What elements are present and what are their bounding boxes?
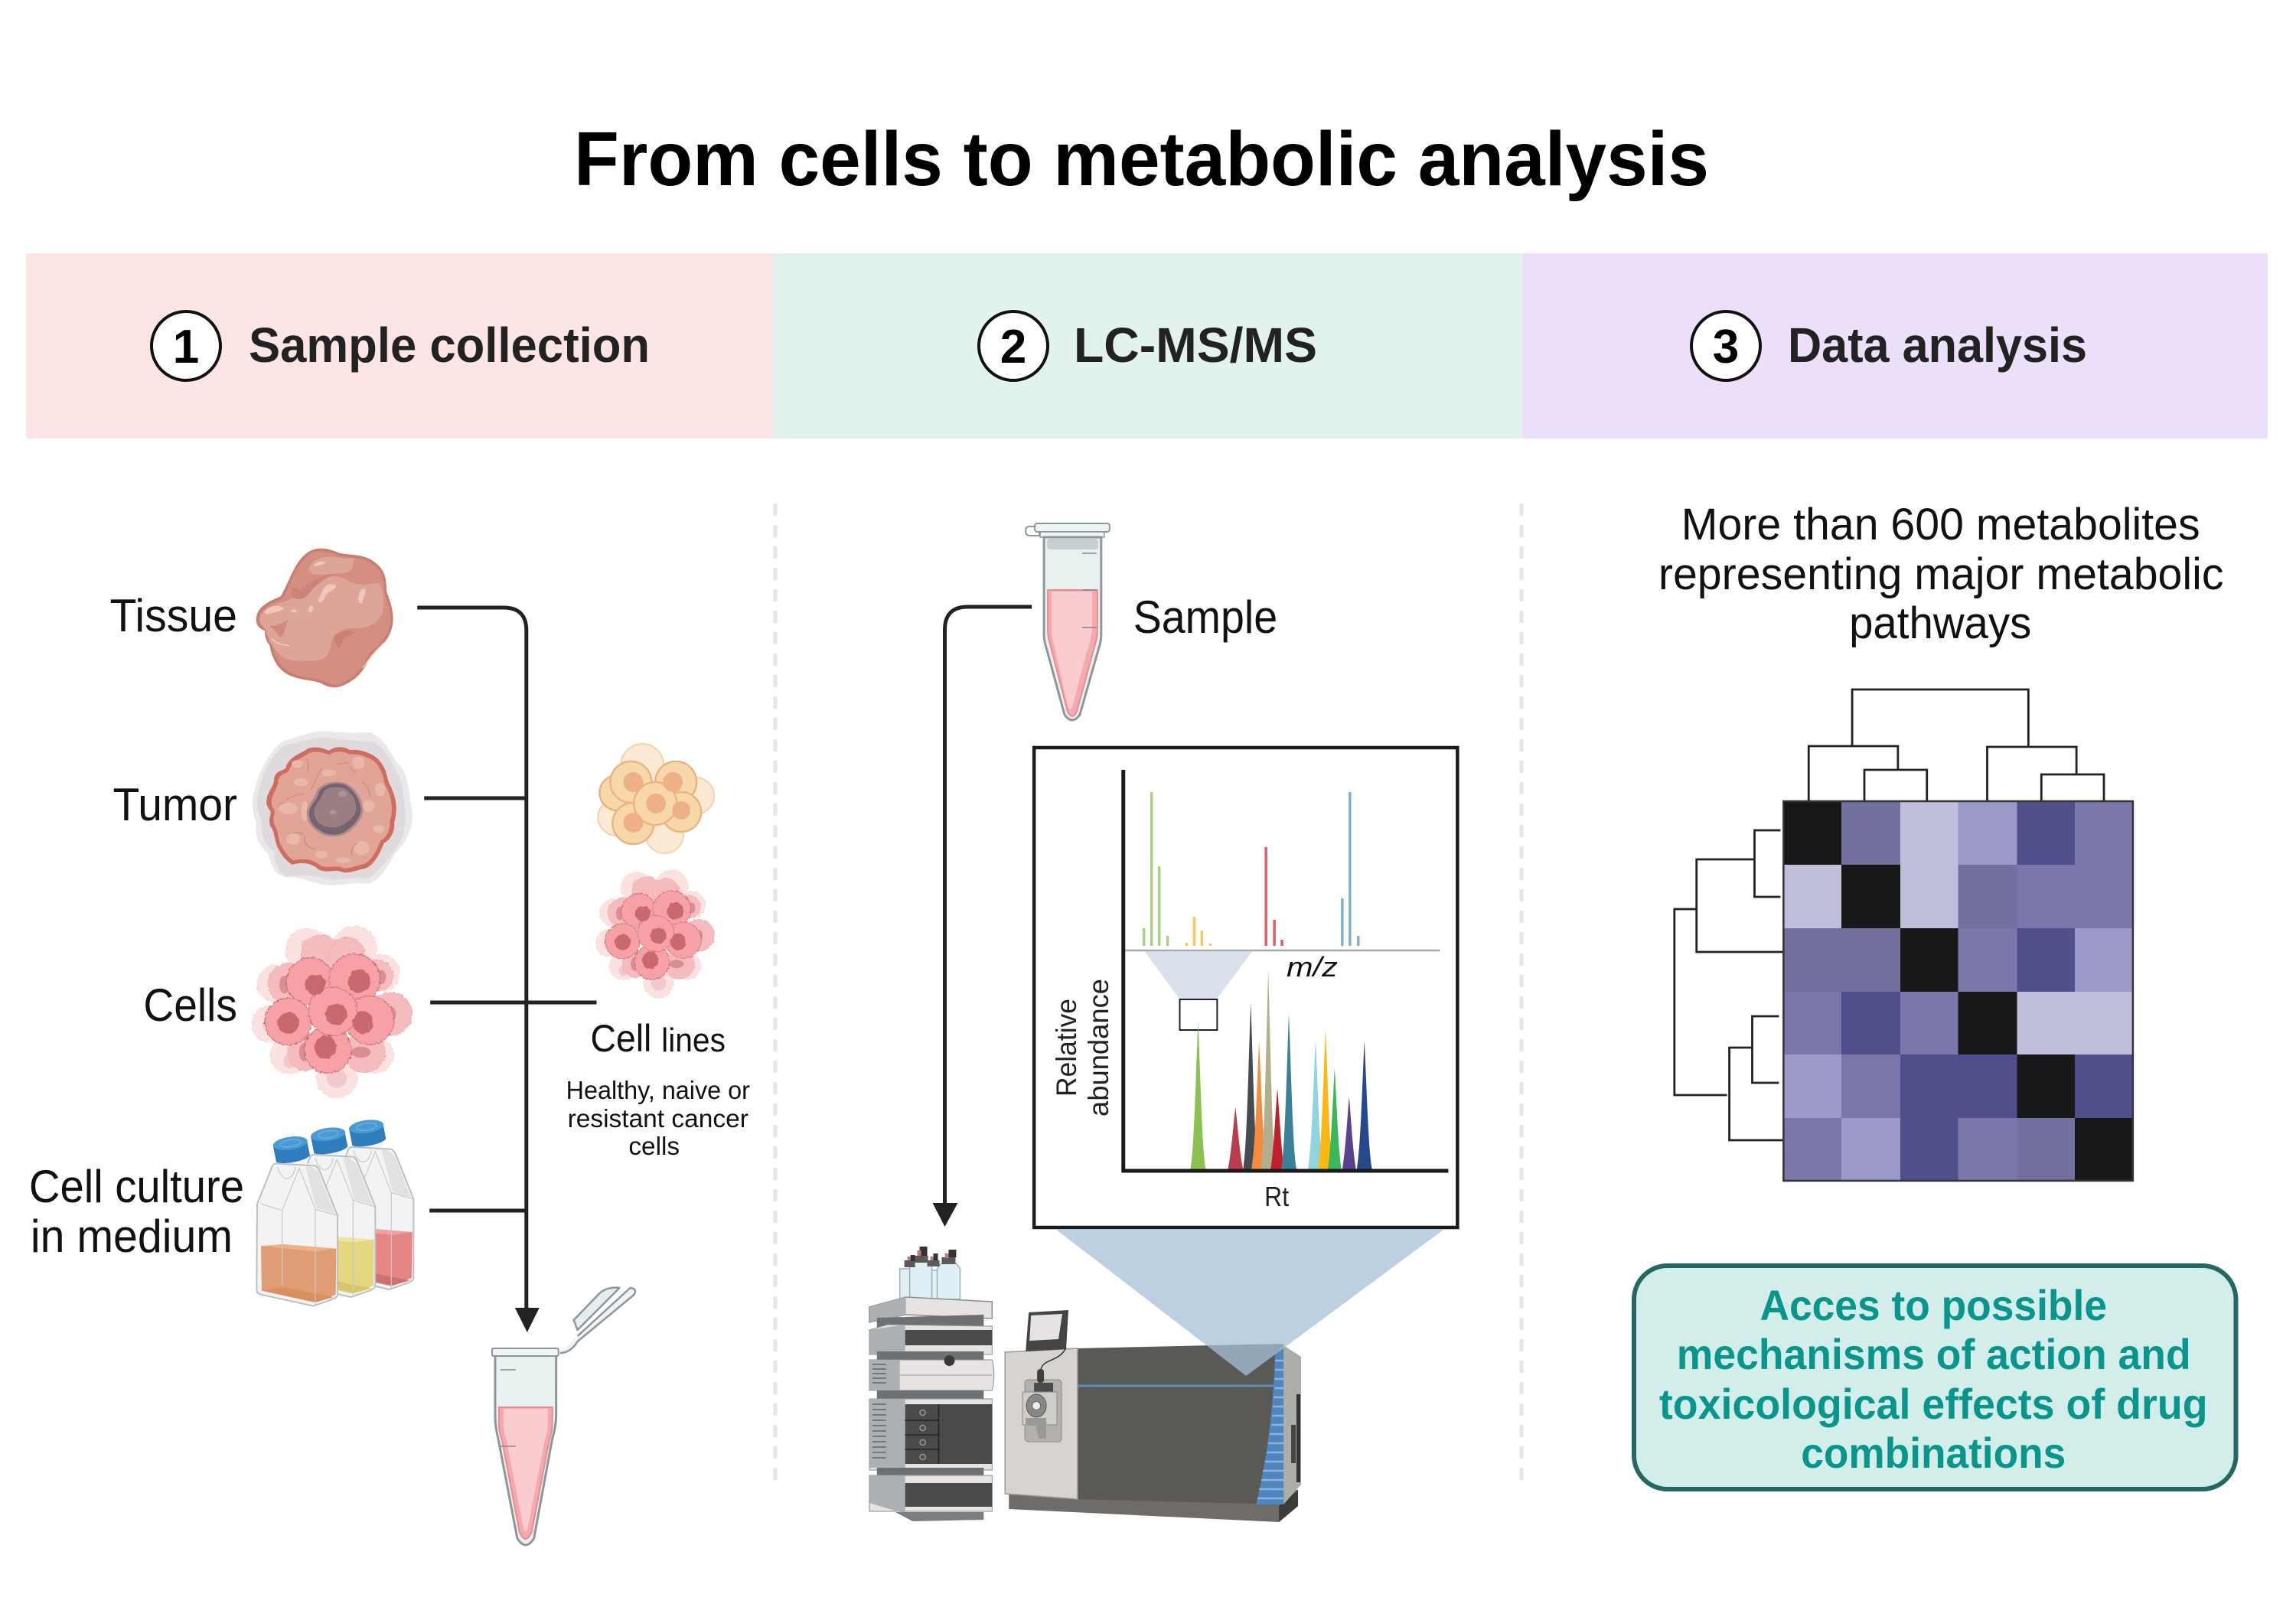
- text: metabolites description: [1658, 500, 2224, 648]
- connector: tumor: [424, 796, 527, 800]
- heatmap with dendrograms: [1675, 689, 2133, 1181]
- connector: culture: [429, 1209, 527, 1212]
- label: Cell lines: Cell lines: [591, 1017, 726, 1060]
- mass spectrum sticks: [1144, 792, 1358, 946]
- label: Relative abundance: Relative: [1051, 999, 1082, 1097]
- chromatogram peaks: [1190, 970, 1372, 1169]
- column 3: data analysis: [1634, 500, 2236, 1489]
- funnel: [1144, 950, 1253, 999]
- callout: toxicological effects of drug: [1659, 1380, 2208, 1428]
- label: m/z: m/z: [1287, 951, 1338, 983]
- icon: sample tube: [1026, 523, 1110, 720]
- step 1 number: 1: [173, 321, 199, 373]
- icon: culture flasks: [256, 1118, 413, 1306]
- step 2 heading: LC-MS/MS: [1074, 318, 1317, 373]
- callout: [1634, 1266, 2236, 1489]
- label: Rt: Rt: [1264, 1181, 1289, 1212]
- connector arrow: sample to LC: [933, 607, 1032, 1227]
- left dendrogram: [1675, 830, 1783, 1140]
- text: cell lines description: cells: [628, 1132, 680, 1160]
- step 3 number: [1691, 311, 1760, 380]
- column 2: LC-MS/MS: [869, 523, 1457, 1522]
- icon: orange cell line: [598, 744, 714, 853]
- projection beam: [1055, 1229, 1444, 1376]
- top dendrogram: [1808, 689, 2104, 801]
- label: Sample: Sample: [1133, 592, 1277, 643]
- label: Tissue: Tissue: [110, 590, 237, 641]
- solvent bottles: [900, 1247, 960, 1299]
- panel: step 3 header: [1523, 253, 2268, 438]
- text: cell lines description: Healthy, naive or: [566, 1076, 750, 1104]
- text: metabolites description: More than 600 metabolites: [1681, 500, 2200, 549]
- label: Relative abundance: [1051, 979, 1114, 1116]
- title: From cells to metabolic analysis: [574, 116, 1709, 202]
- label: Tumor: Tumor: [113, 779, 237, 830]
- step 2 number: 2: [1000, 321, 1026, 373]
- icon: tissue: [256, 549, 393, 687]
- step 3 heading: Data analysis: [1788, 318, 2087, 373]
- text: cell lines description: resistant cancer: [568, 1104, 748, 1133]
- arrow head: to tube: [515, 1308, 540, 1332]
- label: Relative abundance: abundance: [1083, 979, 1114, 1116]
- text: cell lines description: [566, 1076, 750, 1160]
- label: Cell culture in medium: Cell culture: [29, 1161, 244, 1212]
- callout: mechanisms of action and: [1677, 1330, 2191, 1378]
- icon: open tube with sample: [492, 1288, 635, 1545]
- panel: step 2 header: [773, 253, 1523, 438]
- chart box: LC-MS chromatogram: [1034, 748, 1457, 1227]
- heatmap cells: [1783, 801, 2133, 1181]
- label: Cell culture in medium: in medium: [31, 1211, 233, 1262]
- connector: tissue to tube: [417, 608, 527, 1312]
- step 1 heading: Sample collection: [249, 318, 650, 373]
- label: Cell culture in medium: [29, 1161, 244, 1262]
- label: Cells: Cells: [143, 980, 237, 1031]
- icon: LC system: [869, 1247, 994, 1521]
- step 2 number: [979, 311, 1048, 380]
- text: metabolites description: representing major metabolic: [1658, 550, 2224, 599]
- panel: step 1 header: [26, 253, 773, 438]
- step 3 number: 3: [1713, 321, 1739, 373]
- icon: pink cell line: [595, 870, 715, 998]
- connector: cells to cell lines: [430, 1001, 596, 1004]
- icon: mass spectrometer: [1005, 1310, 1301, 1522]
- callout: Acces to possible: [1760, 1281, 2107, 1329]
- icon: tumor: [253, 731, 413, 885]
- column 1: sample collection: [29, 590, 750, 1545]
- icon: cells: [252, 926, 412, 1098]
- step 1 number: [152, 311, 220, 380]
- callout: combinations: [1801, 1429, 2066, 1477]
- axes: [1122, 770, 1448, 1172]
- text: metabolites description: pathways: [1849, 599, 2031, 648]
